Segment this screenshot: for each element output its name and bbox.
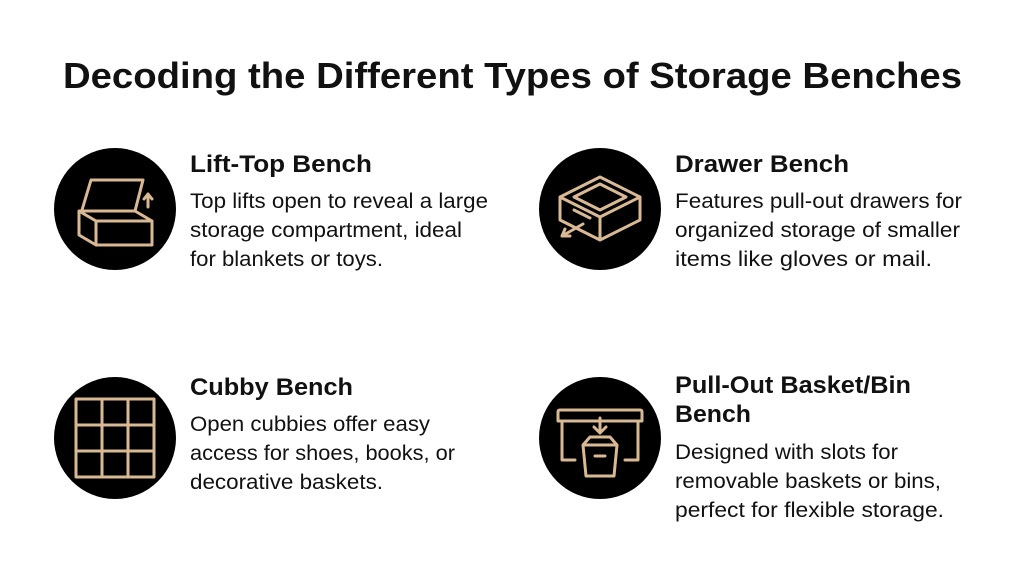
icon: cubby grid (54, 377, 176, 499)
text: drawer description (675, 190, 962, 271)
text: basket description: perfect for flexible storage. (675, 499, 944, 522)
text: lift-top description: for blankets or toys. (190, 248, 383, 271)
panel: pull-out basket bench (539, 372, 944, 522)
icon: drawer (539, 148, 661, 270)
text: basket description (675, 441, 944, 522)
heading: Pull-Out Basket/Bin Bench: Pull-Out Basket/Bin (675, 372, 911, 399)
icon: open lid box (54, 148, 176, 270)
text: drawer description: items like gloves or mail. (675, 248, 932, 271)
text: lift-top description: storage compartment, ideal (190, 219, 462, 242)
panel: cubby bench (54, 374, 455, 499)
heading: Lift-Top Bench: Lift-Top Bench (190, 151, 372, 178)
text: cubby description (190, 413, 455, 494)
heading: Drawer Bench: Drawer Bench (675, 151, 849, 178)
icon: basket under bench (539, 377, 661, 499)
text: cubby description: Open cubbies offer easy (190, 413, 431, 436)
text: cubby description: decorative baskets. (190, 471, 383, 494)
text: lift-top description (190, 190, 488, 271)
title: Decoding the Different Types of Storage Benches (63, 55, 962, 96)
panel: drawer bench (539, 148, 962, 271)
panel: lift-top bench (54, 148, 488, 271)
text: basket description: Designed with slots for (675, 441, 898, 464)
heading: Pull-Out Basket/Bin Bench: Bench (675, 401, 751, 428)
text: drawer description: Features pull-out drawers for (675, 190, 962, 213)
text: lift-top description: Top lifts open to reveal a large (190, 190, 488, 213)
text: basket description: removable baskets or bins, (675, 470, 941, 493)
heading: Cubby Bench: Cubby Bench (190, 374, 353, 401)
heading: Pull-Out Basket/Bin Bench (675, 372, 911, 428)
text: drawer description: organized storage of smaller (675, 219, 960, 242)
text: cubby description: access for shoes, books, or (190, 442, 455, 465)
